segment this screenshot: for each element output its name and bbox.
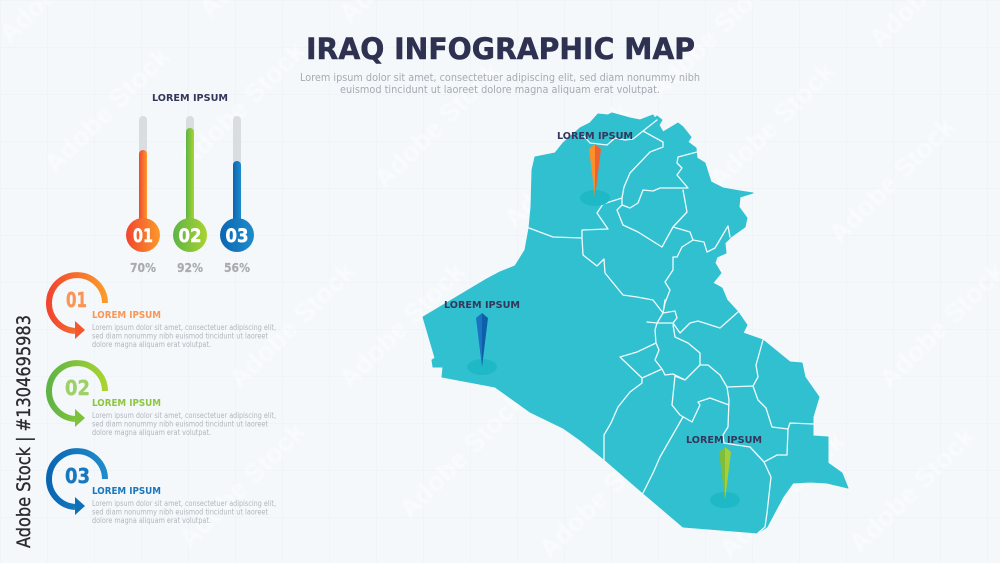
- stock watermark pattern: Adobe Stock: [498, 96, 637, 234]
- title: IRAQ INFOGRAPHIC MAP: [306, 32, 695, 66]
- bar 01: 70%: 01: [133, 225, 153, 247]
- panel: list item 01: Lorem ipsum dolor sit amet, consectetuer adipiscing elit,: [92, 323, 276, 332]
- map pin: orange: [580, 144, 610, 206]
- bar 03: 56%: 03: [226, 225, 248, 247]
- panel: list item 01: 01: [66, 288, 87, 312]
- stock watermark pattern: Adobe Stock: [713, 426, 852, 563]
- panel: list item 03: Lorem ipsum dolor sit amet, consectetuer adipiscing elit,: [92, 499, 276, 508]
- map pin: green: [710, 447, 740, 508]
- panel: list item 02: LOREM IPSUM: [92, 398, 161, 409]
- stock watermark pattern: Adobe Stock: [843, 421, 982, 559]
- bar 02: 92%: [173, 116, 207, 275]
- panel: list item 01: [49, 275, 276, 349]
- stock watermark pattern: Adobe Stock: [703, 56, 842, 194]
- bar 02: 92%: 02: [178, 225, 202, 247]
- map label: south: LOREM IPSUM: [686, 435, 762, 446]
- stock watermark pattern: Adobe Stock: [173, 36, 312, 174]
- panel: list item 03: [49, 451, 276, 525]
- stock watermark pattern: Adobe Stock: [393, 386, 532, 524]
- icon: circular arrow orange: [49, 275, 105, 339]
- stock id vertical text: Adobe Stock | #1304695983: [13, 315, 35, 548]
- stock watermark pattern: Adobe Stock: [368, 56, 507, 194]
- map land shape: [423, 113, 848, 533]
- panel: list item 01: LOREM IPSUM: [92, 310, 161, 321]
- panel: thermometer bar chart: [126, 93, 254, 275]
- panel: list item 02: dolore magna aliquam erat volutpat.: [92, 428, 211, 437]
- chart heading: LOREM IPSUM: [152, 93, 228, 104]
- stock watermark pattern: Adobe Stock: [333, 256, 472, 394]
- map label: west: LOREM IPSUM: [444, 300, 520, 311]
- panel: list item 03: 03: [65, 464, 90, 488]
- panel: list item 01: dolore magna aliquam erat volutpat.: [92, 340, 211, 349]
- panel: list item 02: Lorem ipsum dolor sit amet, consectetuer adipiscing elit,: [92, 411, 276, 420]
- map pin: blue: [467, 313, 497, 375]
- bar 02: 92%: 92%: [177, 261, 203, 275]
- panel: list item 02: [49, 363, 276, 437]
- map of Iraq: [423, 113, 848, 533]
- icon: circular arrow green: [49, 363, 105, 427]
- stock watermark pattern: Adobe Stock: [533, 426, 672, 563]
- bar 03: 56%: [220, 116, 254, 275]
- subtitle text: euismod tincidunt ut laoreet dolore magna aliquam erat volutpat.: [340, 84, 660, 96]
- panel: list item 03: sed diam nonummy nibh euismod tincidunt ut laoreet: [92, 508, 268, 516]
- panel: list item 01: sed diam nonummy nibh euismod tincidunt ut laoreet: [92, 332, 268, 340]
- panel: list item 02: sed diam nonummy nibh euismod tincidunt ut laoreet: [92, 420, 268, 428]
- stock watermark pattern: Adobe Stock: [223, 256, 362, 394]
- stock watermark pattern: Adobe Stock: [538, 226, 677, 364]
- panel: list item 02: 02: [65, 376, 90, 400]
- bar 01: 70%: [126, 116, 160, 275]
- bar 01: 70%: 70%: [130, 261, 156, 275]
- province borders: [529, 120, 813, 533]
- bar 03: 56%: 56%: [224, 261, 250, 275]
- subtitle text: Lorem ipsum dolor sit amet, consectetuer adipiscing elit, sed diam nonummy nibh: [300, 72, 700, 84]
- map label: north: LOREM IPSUM: [557, 131, 633, 142]
- panel: list item 03: LOREM IPSUM: [92, 486, 161, 497]
- stock watermark pattern: Adobe Stock: [823, 111, 962, 249]
- stock watermark pattern: Adobe Stock: [38, 41, 177, 179]
- icon: circular arrow blue: [49, 451, 105, 515]
- stock watermark pattern: Adobe Stock: [173, 416, 312, 554]
- panel: list item 03: dolore magna aliquam erat volutpat.: [92, 516, 211, 525]
- subtitle text: [300, 72, 700, 96]
